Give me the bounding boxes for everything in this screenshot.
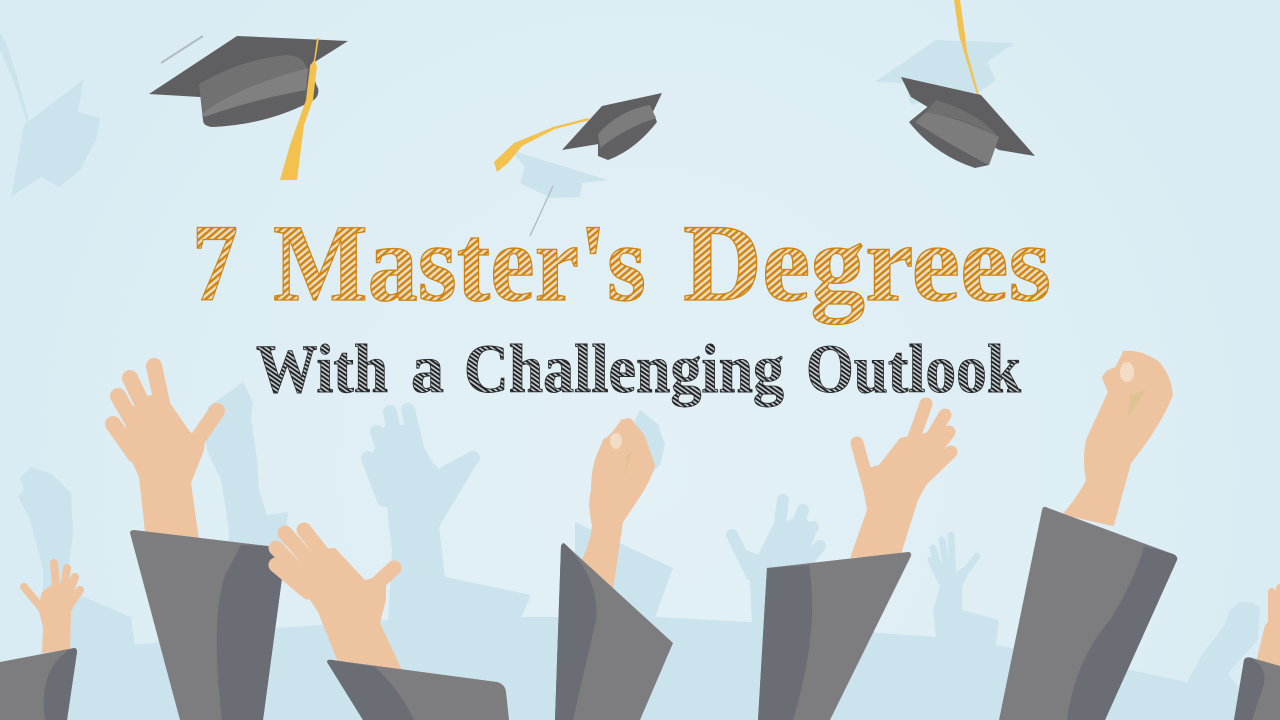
fist crease bbox=[1128, 390, 1146, 418]
subtitle: a bbox=[411, 331, 444, 407]
gown sleeve 2 bbox=[0, 648, 77, 720]
cap crown bbox=[909, 100, 999, 168]
gown sleeve right edge bbox=[1234, 657, 1280, 720]
cap crown bbox=[199, 55, 318, 127]
silhouette hand centre right bbox=[732, 500, 820, 625]
subtitle: Challenging bbox=[464, 331, 784, 407]
raised hand 5 bbox=[850, 404, 951, 558]
silhouette hand far right bbox=[1187, 602, 1260, 690]
thumbnail bbox=[610, 433, 622, 449]
fist crease bbox=[624, 452, 632, 478]
shadow cap top right bbox=[875, 40, 1015, 105]
title: Degrees bbox=[683, 202, 1051, 324]
cap tassel bbox=[494, 118, 590, 172]
title: 7 bbox=[192, 202, 238, 324]
cap board bbox=[901, 77, 1035, 156]
thumbnail bbox=[1120, 362, 1134, 382]
cap board bbox=[149, 36, 348, 97]
title bbox=[192, 202, 1051, 324]
graduation cap 3 bbox=[901, 0, 1035, 168]
gown sleeve centre bbox=[555, 543, 673, 720]
raised fist right bbox=[1064, 352, 1172, 525]
subtitle: With bbox=[256, 331, 388, 407]
subtitle: Outlook bbox=[806, 331, 1022, 407]
raised fist centre bbox=[583, 420, 654, 590]
graduation cap 2 bbox=[494, 93, 662, 172]
silhouette hand centre left bbox=[368, 410, 531, 625]
gown sleeve 1 bbox=[130, 530, 284, 720]
cap tassel bbox=[954, 0, 979, 95]
shadow cap top centre bbox=[510, 150, 608, 236]
title: Master's bbox=[273, 202, 646, 324]
cap tassel bbox=[280, 38, 319, 180]
background crowd silhouettes bbox=[0, 382, 1280, 720]
silhouette arm behind centre sleeve bbox=[575, 522, 673, 620]
gown sleeve 3 bbox=[327, 660, 509, 720]
raised hand 2 bbox=[24, 563, 80, 653]
silhouette hand far left bbox=[18, 467, 75, 620]
silhouette small hand right bbox=[931, 535, 999, 650]
silhouette fingers behind fist bbox=[630, 410, 665, 480]
shadow cap far left bbox=[0, 32, 100, 197]
graduation cap 1 bbox=[149, 36, 348, 180]
cap board bbox=[562, 93, 662, 150]
silhouette hand behind left arm bbox=[203, 382, 288, 560]
raised hand right edge bbox=[1256, 588, 1280, 668]
raised hand 1 bbox=[113, 366, 217, 540]
subtitle bbox=[256, 331, 1022, 407]
gown sleeve 6 bbox=[999, 507, 1177, 720]
crowd ground bbox=[0, 595, 1280, 720]
motion streak bbox=[161, 36, 203, 63]
cap crown bbox=[598, 105, 657, 160]
gown sleeve 5 bbox=[758, 552, 911, 720]
raised hand 3 bbox=[276, 530, 402, 670]
